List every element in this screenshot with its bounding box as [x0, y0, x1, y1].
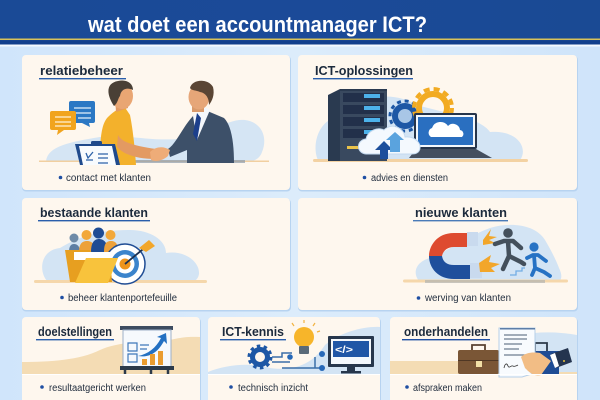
panel: bestaande klanten [22, 198, 291, 312]
icon: briefcase [458, 345, 499, 374]
cloud with arrows [358, 126, 420, 159]
panel: nieuwe klanten [298, 198, 578, 312]
icon: gear [249, 346, 271, 368]
running person dark [495, 228, 524, 269]
panel: doelstellingen [22, 317, 201, 400]
header banner [0, 0, 600, 46]
panel: relatiebeheer [22, 55, 291, 192]
people group [69, 228, 118, 252]
icon: handshake [521, 348, 572, 375]
bullet: werving van klanten: werving van klanten [424, 293, 511, 304]
heading: nieuwe klanten: nieuwe klanten [415, 205, 507, 220]
icon: circuit lines [272, 353, 321, 368]
target with arrow [105, 240, 155, 284]
icon: blue folder [526, 343, 559, 375]
hands [150, 147, 170, 161]
icon: contract document [499, 328, 535, 377]
man in suit [168, 81, 234, 163]
illustration: folder and target [34, 228, 207, 284]
running person blue [527, 242, 550, 276]
person in yellow shirt [100, 80, 156, 165]
icon: monitor with code: </> [335, 345, 353, 356]
panel: onderhandelen [390, 317, 578, 400]
heading: ICT-kennis: ICT-kennis [222, 324, 284, 339]
laptop [409, 113, 492, 158]
illustration: magnet attracting people [403, 225, 568, 283]
bullet: contact met klanten: contact met klanten [66, 173, 151, 184]
heading: bestaande klanten: bestaande klanten [40, 205, 148, 220]
illustration: handshake [39, 80, 269, 165]
folder [65, 250, 118, 283]
panel: ICT-oplossingen [298, 55, 578, 192]
bullet: technisch inzicht: technisch inzicht [238, 383, 308, 394]
heading: onderhandelen: onderhandelen [404, 324, 488, 339]
heading: relatiebeheer: relatiebeheer [40, 63, 123, 78]
icon: light bulb [292, 320, 320, 354]
icon: presentation board with chart [120, 326, 174, 375]
speech bubbles [50, 101, 95, 135]
panel: ICT-kennis [208, 317, 381, 400]
orange gear [414, 89, 452, 127]
bullet: advies en diensten: advies en diensten [371, 173, 448, 184]
sparks [479, 229, 500, 272]
server rack [328, 89, 387, 161]
magnet [429, 232, 482, 279]
heading: doelstellingen: doelstellingen [38, 324, 112, 339]
title: wat doet een accountmanager ICT? [87, 12, 427, 37]
bullet: afspraken maken: afspraken maken [413, 383, 482, 394]
bullet: beheer klantenportefeuille: beheer klantenportefeuille [68, 293, 177, 304]
clipboard [75, 141, 120, 165]
illustration: server, cloud, laptop [313, 89, 528, 162]
heading: ICT-oplossingen: ICT-oplossingen [315, 63, 413, 78]
bullet: resultaatgericht werken: resultaatgericht werken [49, 383, 146, 394]
icon: monitor with code [328, 336, 374, 374]
blue gear [390, 101, 420, 131]
